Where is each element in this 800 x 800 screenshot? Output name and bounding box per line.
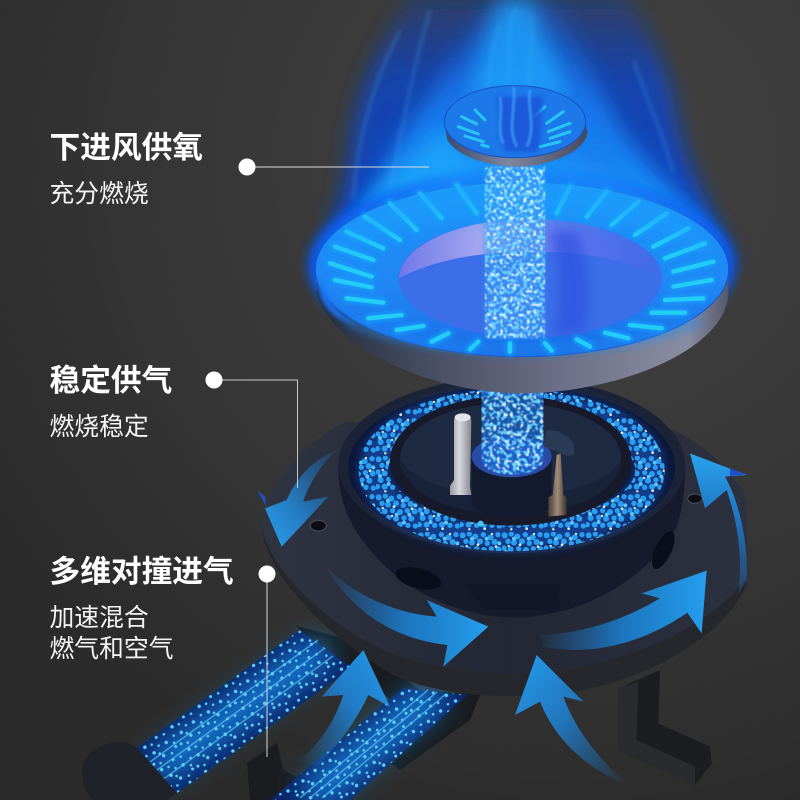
disk rim: [445, 125, 587, 167]
arrow: lower left: [300, 650, 390, 767]
ring hole wall: [399, 219, 662, 278]
rim left flame: [317, 277, 357, 325]
heading: 稳定供气: 稳定供气: [50, 363, 172, 398]
outer glow: [308, 172, 735, 362]
pipe one: [137, 630, 352, 793]
ring rim: [317, 270, 728, 393]
arrow: right plate: [690, 453, 747, 593]
bubble column: [485, 167, 545, 338]
lower bubble column: [482, 390, 543, 475]
burner lower chamfer: [262, 513, 747, 696]
burner leg: [618, 670, 712, 785]
lower bubble column glow: [482, 390, 543, 475]
burner pipes: [82, 626, 480, 800]
ring fins glow: [330, 185, 713, 352]
arrow: front right: [540, 571, 707, 650]
flames back: [313, 0, 737, 267]
igniter: [450, 413, 471, 495]
bubble ring: [373, 403, 650, 537]
flame ring: [308, 157, 735, 393]
arrow: bottom center: [515, 655, 630, 787]
small top disk: [444, 86, 587, 167]
lone bubble: [478, 521, 484, 527]
pipe bracket: [247, 743, 297, 800]
arrow: left plate: [265, 450, 337, 547]
callout: 稳定供气: [50, 363, 298, 488]
heading: 多维对撞进气: 多维对撞进气: [50, 554, 234, 589]
center post: [472, 457, 552, 517]
text: 燃烧稳定: 燃烧稳定: [50, 413, 149, 441]
screw holes: [310, 494, 702, 531]
disk top: [444, 86, 586, 158]
cup body: [338, 465, 685, 617]
pipe end cap: [82, 742, 177, 800]
burner plate: [262, 422, 747, 674]
air slots: [393, 528, 679, 610]
heading: 下进风供氧: 下进风供氧: [50, 130, 203, 165]
ring glow: [373, 403, 650, 537]
ring fins: [330, 185, 713, 352]
inner chamber: [390, 396, 631, 526]
thermocouple needle: [548, 453, 567, 517]
pipe two: [270, 688, 467, 800]
hole blur: [550, 230, 588, 333]
cup top: [338, 377, 685, 553]
blue flow arrows: [257, 450, 747, 787]
ring top: [315, 182, 729, 357]
pipe neck: [296, 626, 480, 770]
swirl plate: [543, 430, 574, 456]
disk center flame: [497, 97, 543, 152]
ring hole floor: [398, 219, 662, 338]
arrow: front left: [323, 563, 488, 667]
text: 充分燃烧: 充分燃烧: [50, 180, 149, 208]
text: 加速混合 燃气和空气: 加速混合: [50, 604, 149, 632]
flame wash over back of ring: [320, 157, 727, 253]
bubble column top glow: [486, 165, 546, 345]
callout: 多维对撞进气: [50, 554, 276, 757]
disk fins: [458, 107, 570, 147]
rim bottom glow: [347, 320, 700, 350]
text: 加速混合 燃气和空气: 燃气和空气: [50, 635, 174, 663]
callout: 下进风供氧: [50, 130, 429, 208]
lower burner: [262, 377, 747, 696]
